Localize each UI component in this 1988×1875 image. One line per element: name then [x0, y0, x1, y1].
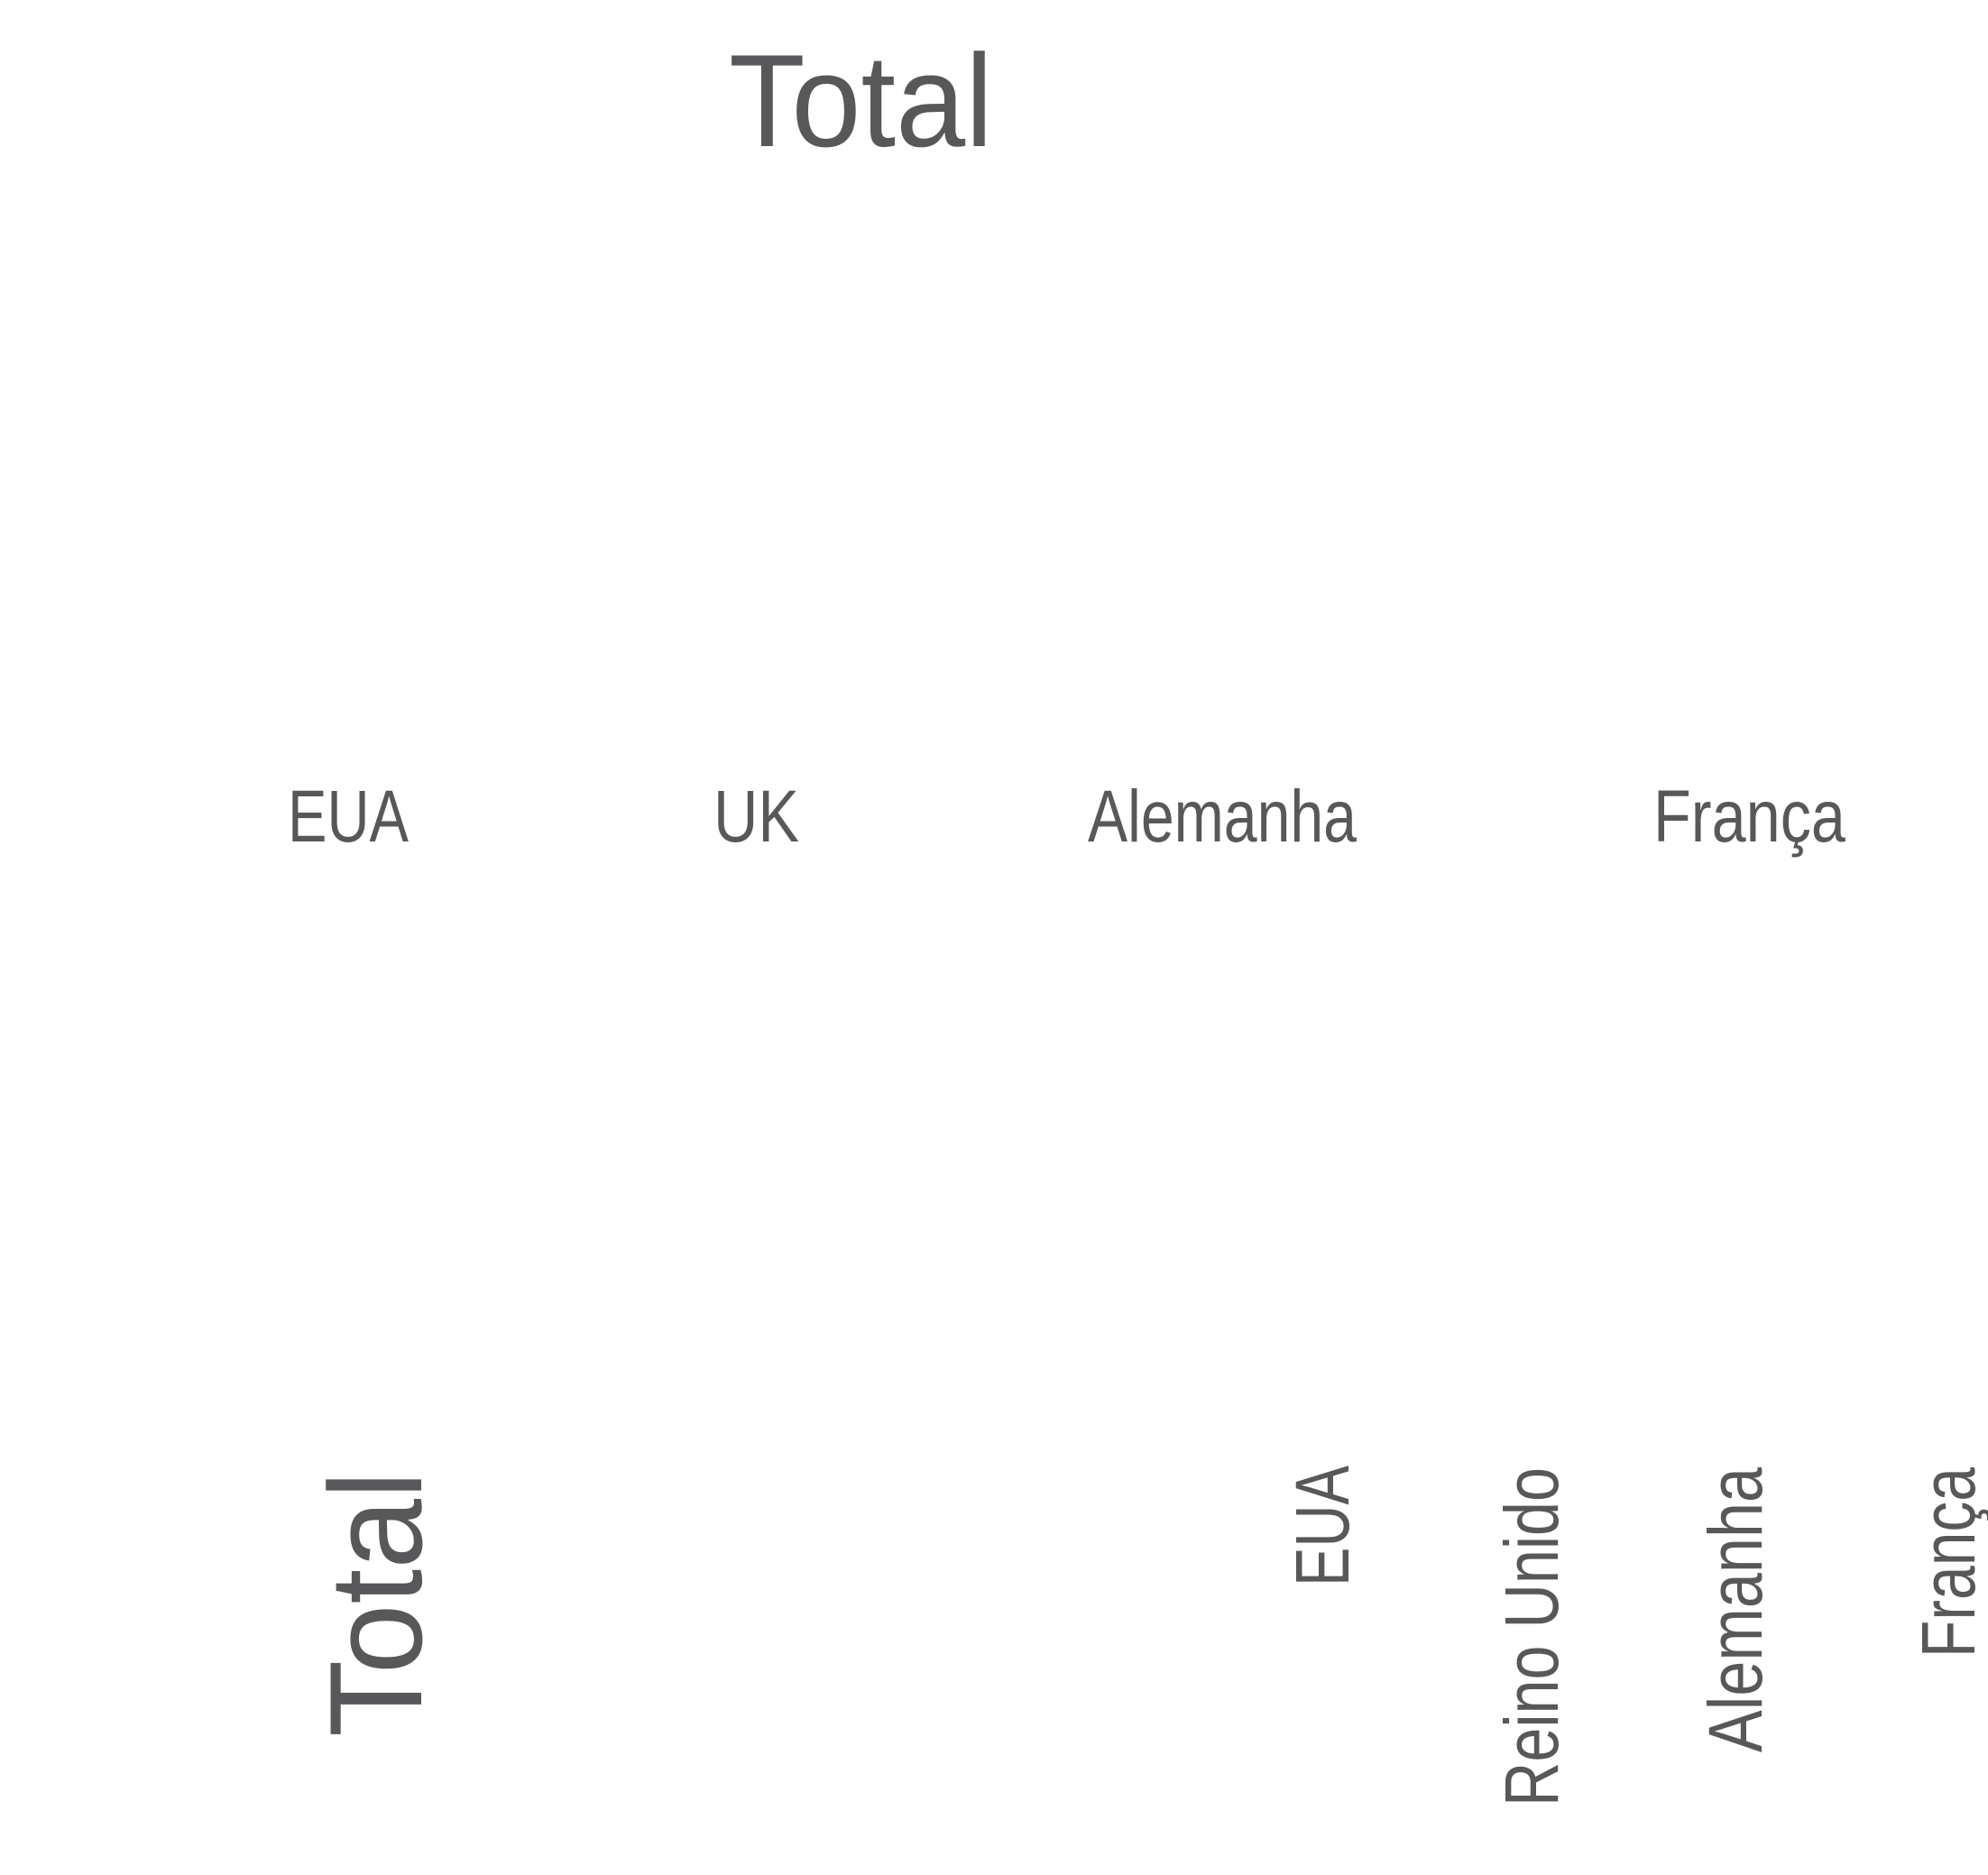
- label: França: França: [1653, 776, 1845, 858]
- vertical label: EUA: EUA: [1280, 1466, 1365, 1586]
- label: EUA: EUA: [288, 776, 409, 858]
- vertical label: Reino Unido: Reino Unido: [1489, 1467, 1574, 1806]
- vertical title: Total: Total: [302, 1471, 449, 1737]
- vertical label: Alemanha: Alemanha: [1693, 1467, 1778, 1752]
- label: Alemanha: Alemanha: [1088, 776, 1357, 858]
- title: Total: Total: [729, 27, 993, 174]
- label: UK: UK: [713, 776, 799, 858]
